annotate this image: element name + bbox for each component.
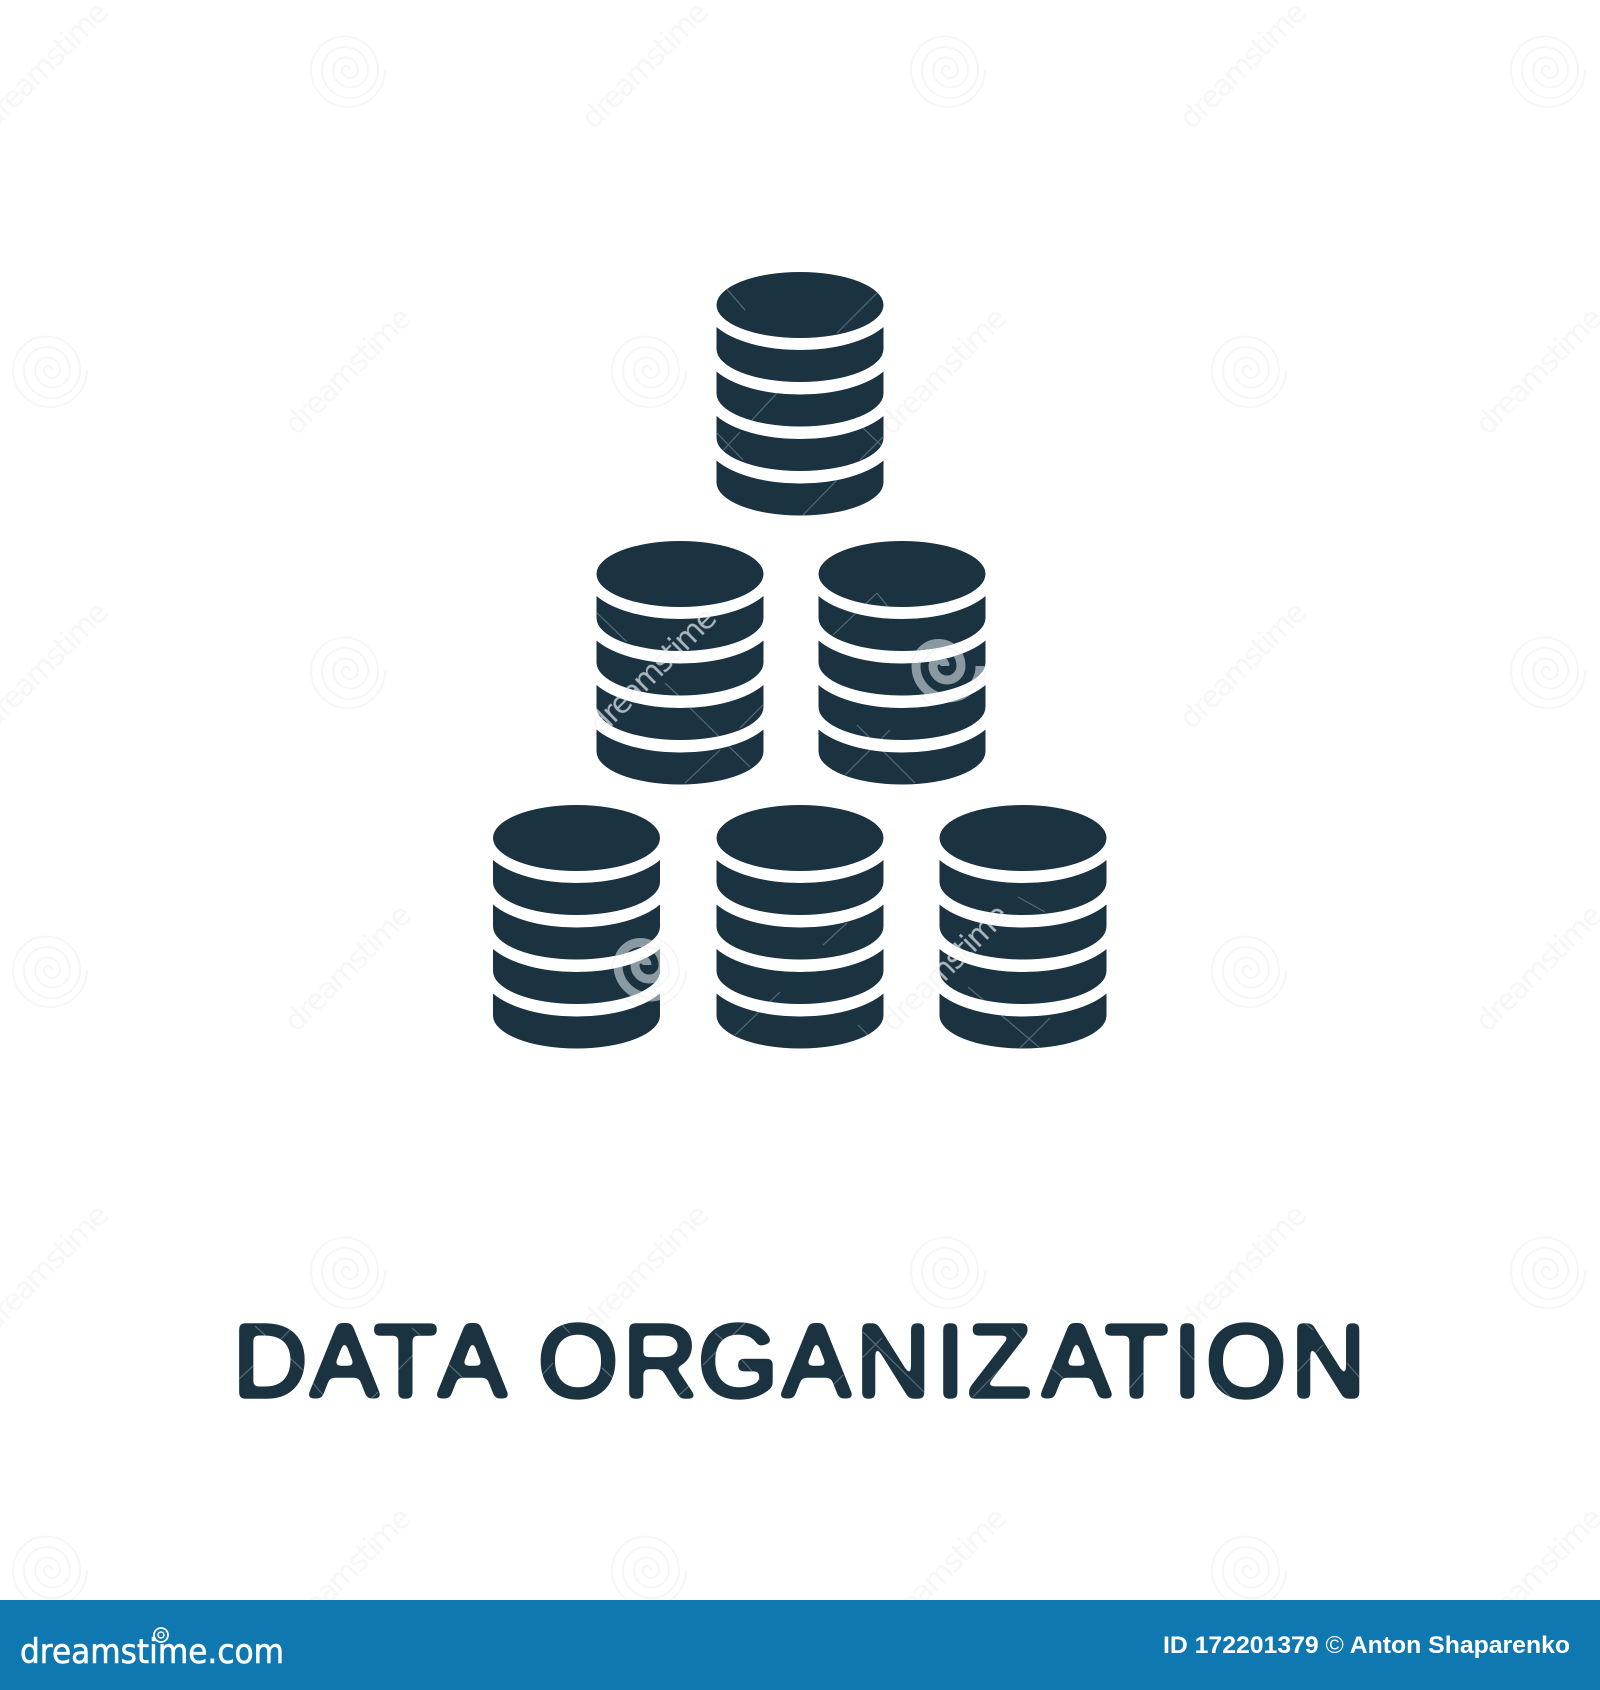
title: DATA ORGANIZATION (233, 1304, 1365, 1418)
icon: bottom centre database stack (716, 805, 884, 1048)
faint watermark pattern: dreamstime (278, 301, 419, 442)
faint watermark pattern: dreamstime (1173, 595, 1314, 736)
footer credit: ID 172201379 © Anton Shaparenko (1163, 1632, 1570, 1659)
icon: pyramid of database stacks (493, 272, 1106, 1048)
footer logo: dreamstime.com: dreamstime.com (20, 1632, 284, 1672)
faint watermark pattern: dreamstime (875, 898, 1016, 1039)
icon: middle left database stack (596, 541, 764, 784)
icon: middle right database stack (818, 541, 986, 784)
faint watermark pattern: dreamstime (575, 1198, 716, 1339)
icon: bottom right database stack (940, 805, 1106, 1048)
icon: bottom left database stack (493, 805, 660, 1048)
faint watermark pattern: dreamstime (873, 301, 1014, 442)
watermark overlay on dark shapes (238, 287, 1360, 1400)
watermark overlay on dark shapes: dreamstime (583, 601, 724, 742)
faint watermark pattern: dreamstime (1173, 1198, 1314, 1339)
faint watermark pattern: dreamstime (278, 1501, 419, 1642)
footer bar (0, 1600, 1600, 1690)
faint watermark pattern: dreamstime (583, 601, 724, 742)
icon: top database stack (716, 272, 884, 516)
faint watermark pattern: dreamstime (278, 898, 419, 1039)
faint watermark pattern: dreamstime (873, 1501, 1014, 1642)
watermark overlay on dark shapes: dreamstime (875, 898, 1016, 1039)
